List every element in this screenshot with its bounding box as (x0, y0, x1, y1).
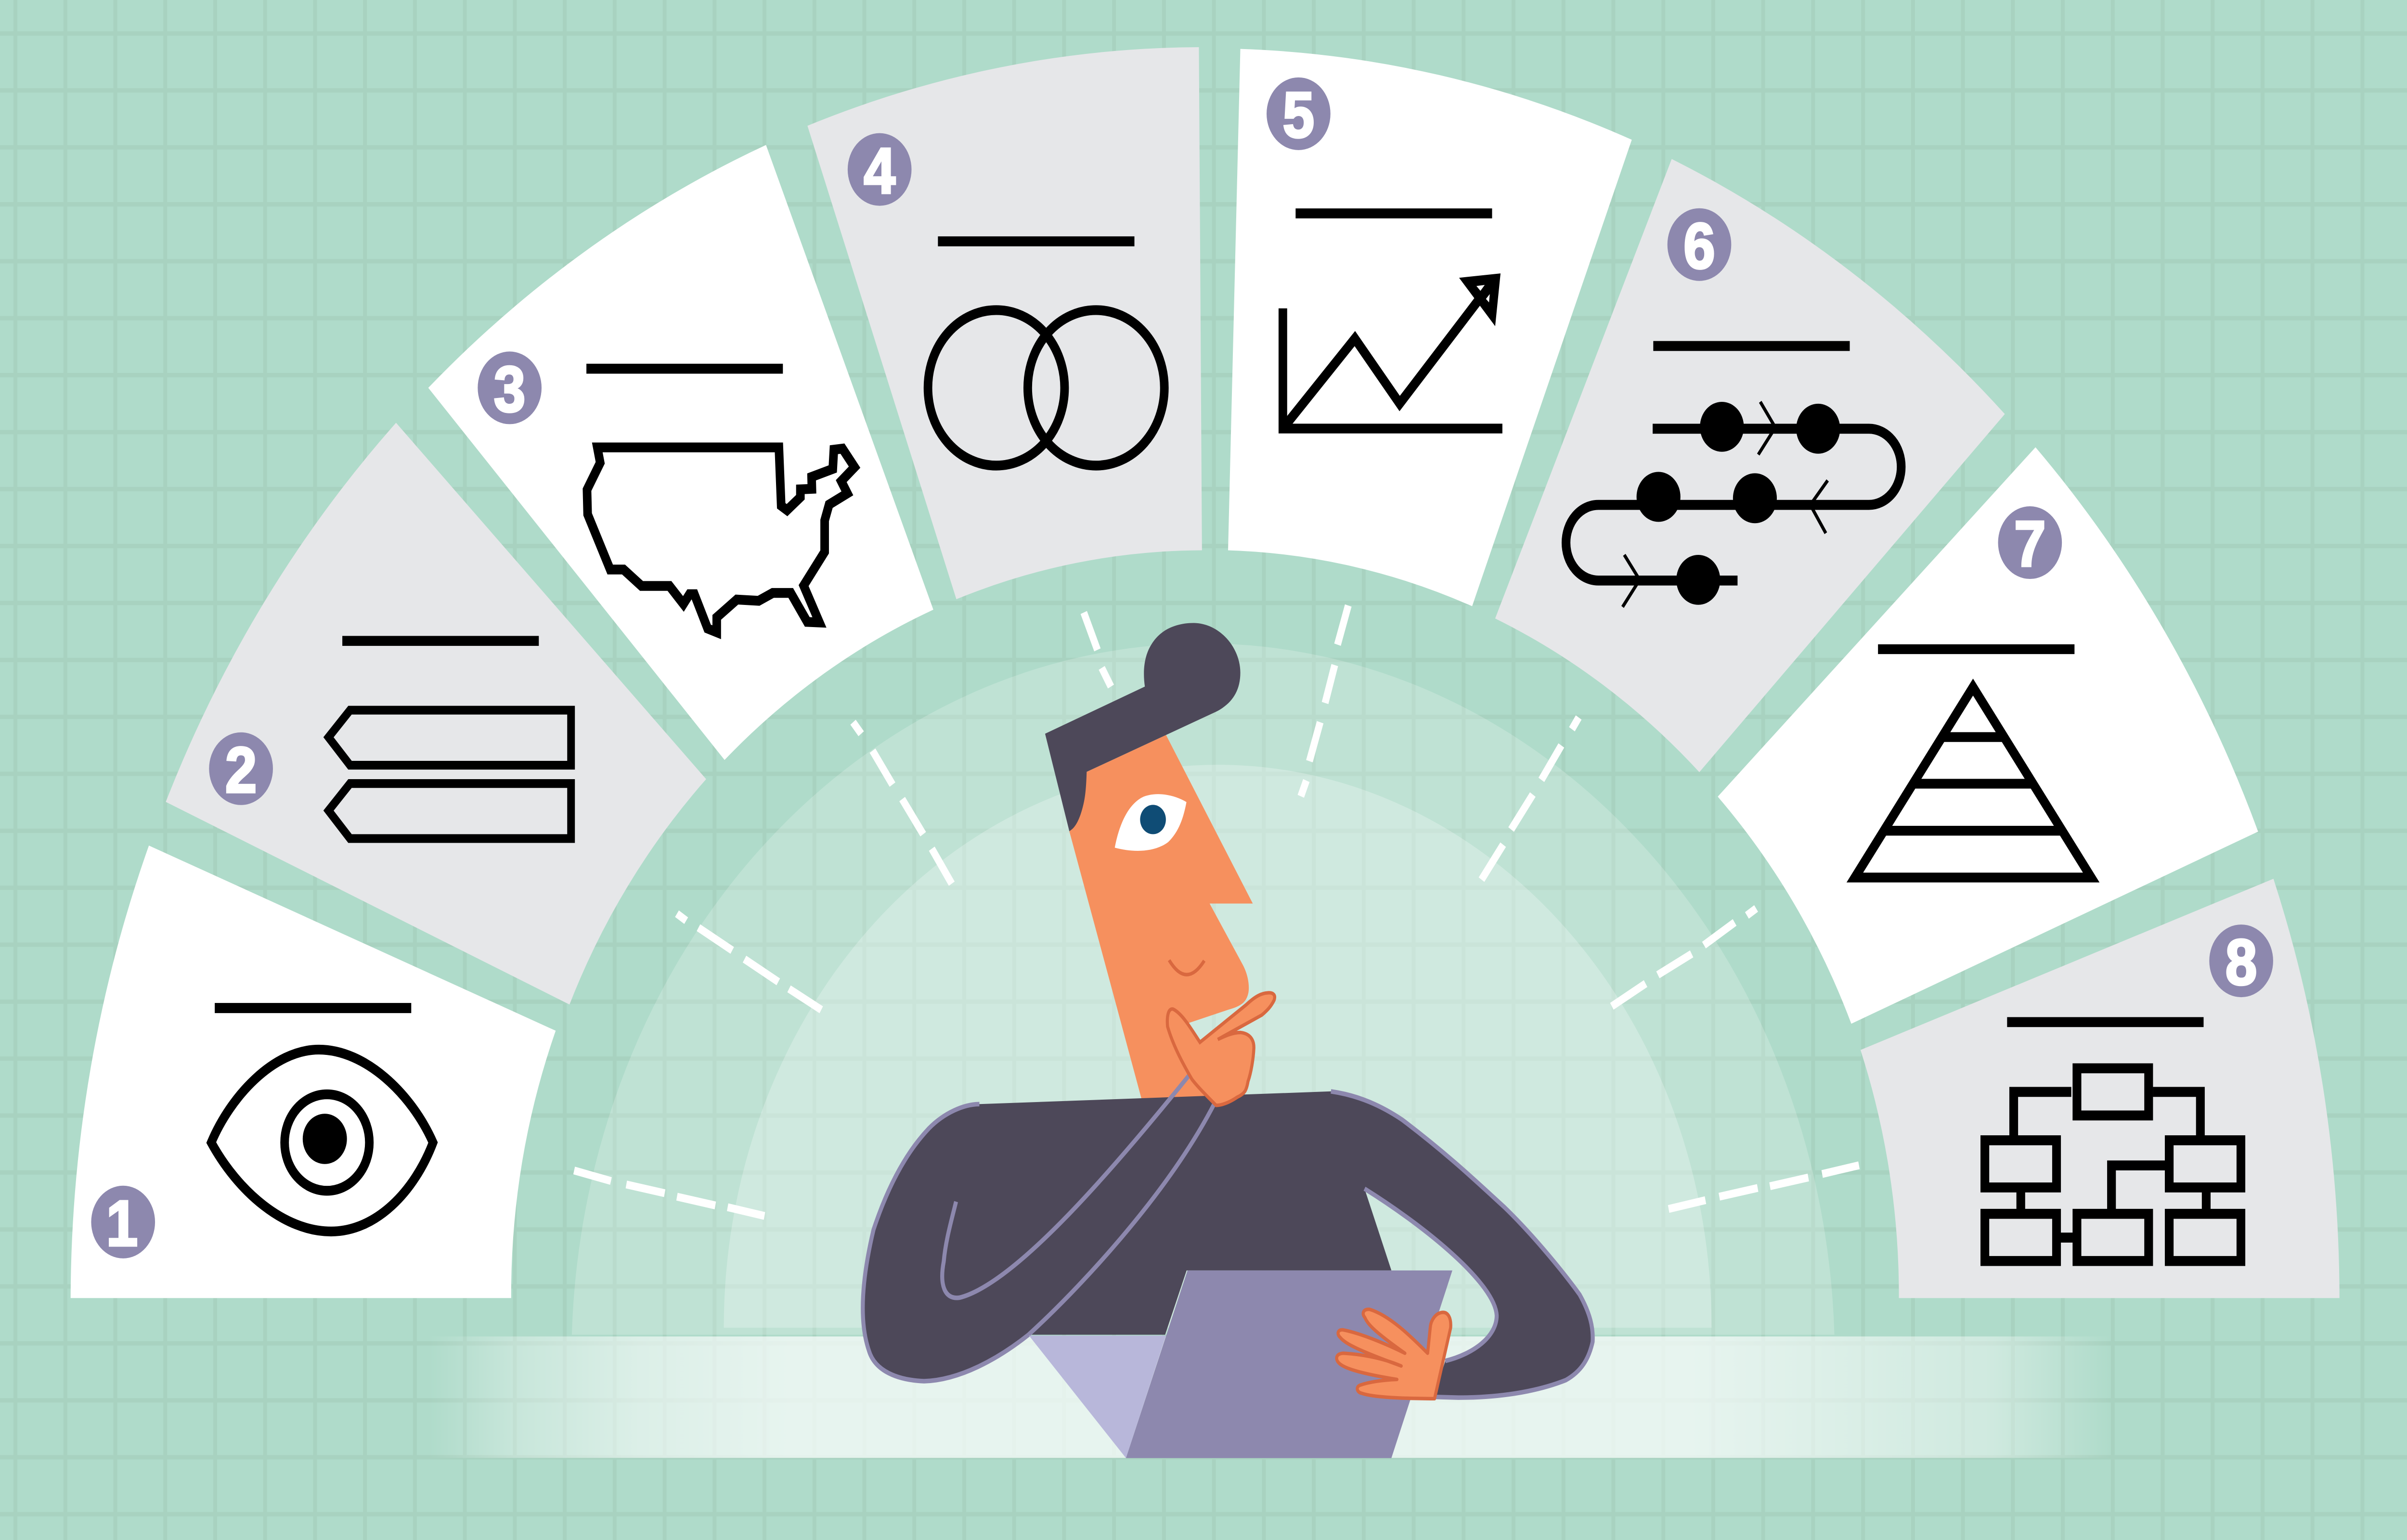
panel 8: flowchart (1861, 879, 2340, 1298)
outer dome (572, 643, 1835, 1335)
number 6 badge (1668, 208, 1731, 282)
icon: US map (587, 448, 854, 632)
thinking person (863, 623, 1593, 1458)
icon: venn diagram (928, 310, 1165, 465)
number 4 badge (848, 133, 911, 207)
number 1 badge: 1 (106, 1187, 138, 1259)
inner dome (724, 765, 1711, 1328)
number 8 badge (2209, 924, 2273, 998)
icon: stacked tags (328, 710, 571, 838)
icon: eye (211, 1050, 433, 1232)
panel 8 title bar (2007, 1017, 2203, 1027)
icon: pyramid (1855, 687, 2091, 877)
icon: flowchart (1985, 1068, 2241, 1261)
number 3 badge (478, 351, 542, 425)
panel 7 title bar (1878, 644, 2074, 654)
number 4 badge: 4 (864, 135, 895, 207)
panel 7: pyramid (1718, 447, 2258, 1024)
panel 1 title bar (215, 1003, 411, 1013)
panel 3 title bar (586, 364, 783, 373)
sweater body and arms (863, 1091, 1593, 1398)
tablet underside (1029, 1335, 1166, 1458)
table band (428, 1336, 2111, 1458)
dashed sight lines (574, 605, 1859, 1216)
number 5 badge: 5 (1283, 79, 1314, 151)
face and neck (1069, 735, 1253, 1118)
mouth (1169, 960, 1204, 975)
panel 6 title bar (1653, 341, 1850, 351)
panel 2: tags (166, 423, 706, 1004)
hand on chin (1167, 993, 1275, 1105)
number 2 badge: 2 (225, 734, 257, 806)
icon: winding timeline (1566, 402, 1901, 607)
hair (1045, 623, 1241, 831)
panel 3: map (428, 145, 933, 760)
panel 5: line chart (1228, 49, 1632, 606)
panel 2 title bar (342, 636, 539, 646)
number 5 badge (1267, 77, 1331, 151)
icon: line chart with arrow (1283, 273, 1502, 428)
panel 1: eye (71, 846, 556, 1298)
number 7 badge (1998, 506, 2062, 580)
panel 5 title bar (1295, 208, 1492, 218)
number 1 badge (91, 1186, 155, 1259)
hand on tablet (1337, 1309, 1451, 1399)
number 8 badge: 8 (2226, 926, 2257, 998)
panel 4: venn (807, 47, 1202, 599)
number 7 badge: 7 (2014, 508, 2046, 580)
sweater outlines (863, 1073, 1593, 1398)
number 2 badge (209, 732, 273, 806)
panel 4 title bar (938, 236, 1135, 246)
eye (1115, 794, 1187, 851)
number 3 badge: 3 (494, 353, 525, 425)
number 6 badge: 6 (1683, 210, 1715, 282)
panel 6: winding path (1495, 159, 2005, 772)
tablet (1126, 1270, 1452, 1458)
